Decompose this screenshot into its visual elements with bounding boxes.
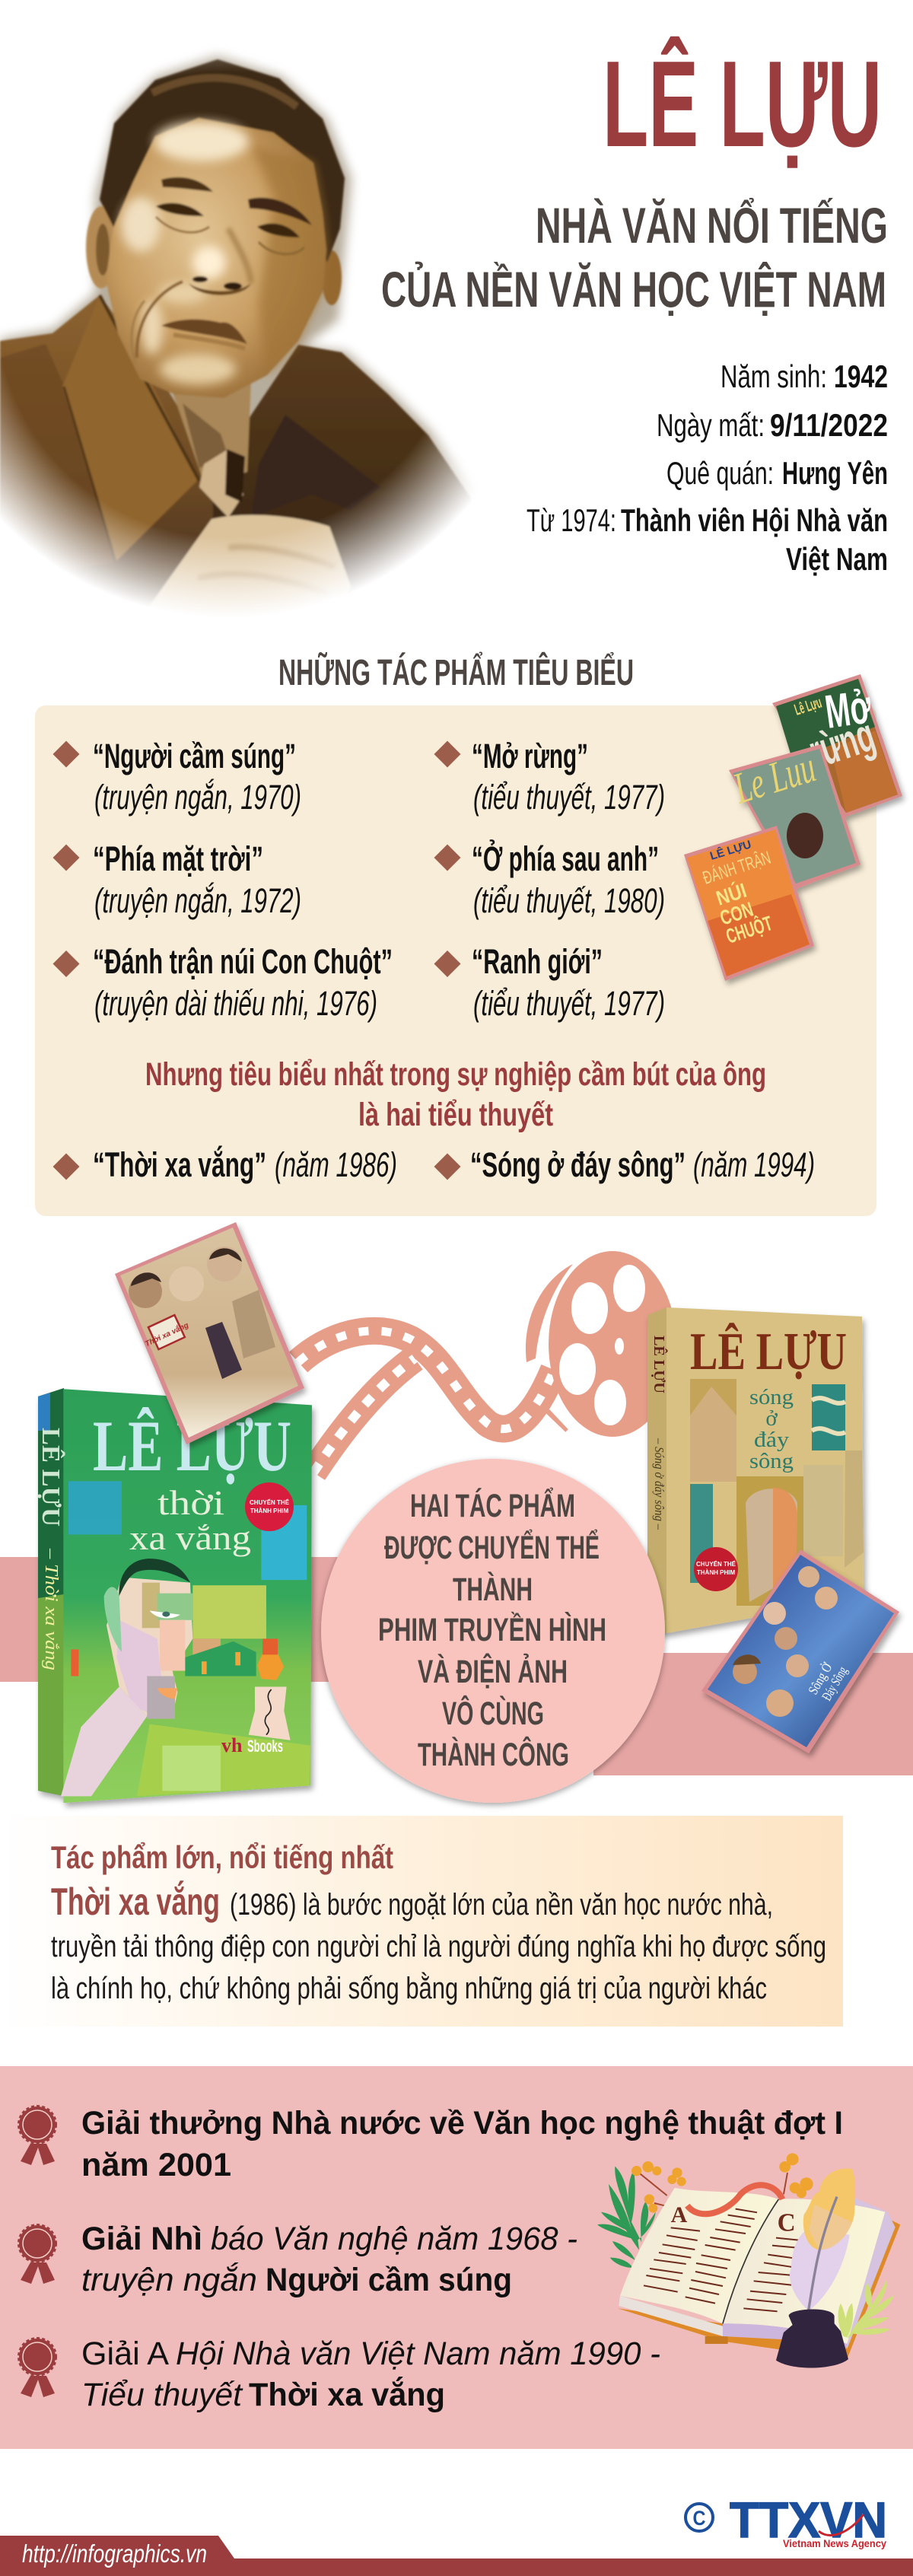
book cover: Sóng ở đáy sông: ở (765, 1406, 778, 1431)
list: works column one: “Đánh trận núi Con Chuột” (93, 942, 393, 981)
book cover: Thời xa vắng: vh (221, 1734, 243, 1756)
award 1: Giải thưởng Nhà nước về Văn học nghệ thuật đợt I (81, 2105, 843, 2141)
leaves and berries (597, 2153, 813, 2268)
two key novels: (năm 1994) (693, 1145, 815, 1184)
award 1 (19, 2105, 843, 2183)
poster: Thời xa vắng film (115, 1222, 304, 1444)
circle callout: film adaptations (321, 1459, 665, 1803)
book: A (671, 2202, 688, 2227)
circle callout: film adaptations: VÔ CÙNG (442, 1695, 544, 1732)
cover: Đánh trận núi Con Chuột: ĐÁNH TRẬN (701, 848, 773, 889)
two key novels: (năm 1986) (275, 1145, 397, 1184)
list: works column one: (truyện ngắn, 1970) (94, 778, 301, 817)
book cover: Thời xa vắng: thời (157, 1483, 224, 1522)
cover: Đánh trận núi Con Chuột: CON (717, 898, 756, 930)
author facts: 9/11/2022 (770, 407, 888, 443)
text box: most famous work (0, 1816, 843, 2027)
subtitle (381, 197, 888, 317)
list: works column two: (tiểu thuyết, 1980) (473, 881, 665, 920)
book cover: Sóng ở đáy sông: THÀNH PHIM (697, 1569, 735, 1576)
list: works column one (53, 737, 393, 1023)
list: works column one: “Người cầm súng” (93, 737, 296, 775)
list: works column two: “Ở phía sau anh” (472, 839, 659, 878)
collar left (62, 320, 198, 560)
book cover: Sóng ở đáy sông: sóng (749, 1385, 794, 1409)
highlight statement: là hai tiểu thuyết (358, 1097, 553, 1133)
ears (86, 206, 116, 288)
two key novels: “Sóng ở đáy sông” (470, 1145, 686, 1184)
book covers: small stack (684, 674, 902, 981)
book cover: Sóng ở đáy sông (647, 1307, 864, 1633)
book cover: Thời xa vắng (37, 1388, 312, 1803)
cheek folds (137, 282, 183, 358)
award 2: báo Văn nghệ năm 1968 - (211, 2221, 577, 2257)
DVD cover: Sóng ở đáy sông (701, 1549, 899, 1753)
two key novels: “Thời xa vắng” (93, 1145, 266, 1184)
quill (790, 2168, 855, 2315)
panel: representative works (35, 705, 876, 1216)
poster: Thời xa vắng film: Thời xa vắng (143, 1320, 190, 1348)
cover: Đánh trận núi Con Chuột: CHUỘT (723, 911, 775, 948)
award 2: truyện ngắn (81, 2262, 257, 2298)
book cover: Sóng ở đáy sông: đáy (754, 1428, 790, 1452)
cover: Mở rừng (772, 674, 902, 817)
award 2 (19, 2221, 577, 2298)
portrait photo: Lê Lựu (0, 55, 483, 639)
author facts: 1942 (834, 358, 888, 394)
book cover: Sóng ở đáy sông: LÊ LỰU (651, 1336, 669, 1393)
book cover: Thời xa vắng: LÊ LỰU (37, 1428, 65, 1527)
green sprig (838, 2281, 894, 2339)
footer bar with URL (0, 2536, 913, 2576)
author facts: Năm sinh: (721, 358, 827, 394)
illustration: open book, quill and inkwell (597, 2153, 900, 2368)
book cover: Thời xa vắng: – Thời xa vắng (41, 1548, 61, 1670)
list: works column two (434, 737, 665, 1023)
cover: Mở rừng: Mở (822, 680, 875, 739)
background band: right (593, 1653, 913, 1775)
circle callout: film adaptations: HAI TÁC PHẨM (410, 1487, 575, 1524)
text box: most famous work: Tác phẩm lớn, nổi tiếng nhất (51, 1839, 393, 1875)
book cover: Thời xa vắng: THÀNH PHIM (250, 1508, 288, 1514)
circle callout: film adaptations: THÀNH CÔNG (418, 1736, 569, 1773)
footer bar with URL: http://infographics.vn (22, 2539, 207, 2568)
list: works column two: (tiểu thuyết, 1977) (473, 778, 665, 817)
cover: Lê Lựu grey-green (727, 742, 861, 890)
book cover: Thời xa vắng: Sbooks (247, 1737, 283, 1756)
copyright symbol: C (692, 2507, 706, 2530)
award 3: Hội Nhà văn Việt Nam năm 1990 - (176, 2336, 660, 2372)
cover: Đánh trận núi Con Chuột (684, 826, 814, 981)
book cover: Thời xa vắng: xa vắng (129, 1518, 251, 1557)
book cover: Thời xa vắng: LÊ LỰU (93, 1406, 291, 1486)
face (106, 118, 326, 398)
cover: Lê Lựu grey-green: Le Luu (727, 742, 821, 814)
list: works column one: (truyện ngắn, 1972) (94, 881, 301, 920)
film strip (298, 1331, 554, 1473)
cover: Mở rừng: Lê Lựu (792, 694, 824, 719)
book cover: Sóng ở đáy sông: CHUYỂN THỂ (696, 1561, 736, 1568)
circle callout: film adaptations: ĐƯỢC CHUYỂN THỂ (384, 1529, 600, 1566)
DVD cover: Sóng ở đáy sông: Sông Ở (804, 1660, 835, 1697)
award 3: Giải A (81, 2336, 169, 2372)
collar right (254, 416, 379, 500)
award 3: Thời xa vắng (249, 2376, 445, 2413)
circle callout: film adaptations: THÀNH (453, 1571, 533, 1608)
list: works column one: (truyện dài thiếu nhi, 1976) (94, 984, 377, 1023)
list: works column two: “Mở rừng” (472, 737, 588, 775)
list: works column two: (tiểu thuyết, 1977) (473, 984, 665, 1023)
shirt (173, 384, 252, 475)
hair (100, 59, 345, 263)
book cover: Sóng ở đáy sông: sông (749, 1449, 794, 1473)
book: C (778, 2209, 796, 2237)
author facts: Quê quán: (666, 455, 774, 491)
nose (189, 283, 251, 295)
background band: left (0, 1557, 396, 1682)
heading: representative works: NHỮNG TÁC PHẨM TIÊU BIỂU (278, 651, 634, 693)
circle callout: film adaptations: VÀ ĐIỆN ẢNH (418, 1653, 568, 1690)
circle callout: film adaptations: PHIM TRUYỀN HÌNH (378, 1612, 606, 1648)
book cover: Sóng ở đáy sông: LÊ LỰU (690, 1323, 847, 1381)
book cover: Sóng ở đáy sông: – Sóng ở đáy sông – (652, 1438, 666, 1530)
text box: most famous work: Thời xa vắng (51, 1880, 220, 1923)
DVD cover: Sóng ở đáy sông: Đáy Sông (819, 1664, 850, 1703)
hand (152, 513, 350, 613)
award 2: Người cầm súng (266, 2262, 512, 2298)
list: works column two: “Ranh giới” (472, 942, 603, 981)
two key novels (53, 1145, 815, 1184)
author facts: Ngày mất: (657, 407, 765, 443)
award 3 (19, 2336, 660, 2413)
film reel (526, 1251, 676, 1437)
cover: Đánh trận núi Con Chuột: LÊ LỰU (708, 837, 753, 863)
panel: awards (0, 2066, 913, 2449)
book (618, 2185, 900, 2359)
inkwell (776, 2310, 848, 2368)
logo: TTXVN: Vietnam News Agency (783, 2537, 886, 2549)
book cover: Thời xa vắng: CHUYỂN THỂ (250, 1499, 290, 1506)
cover: Đánh trận núi Con Chuột: NÚI (713, 878, 749, 910)
soft halo (0, 50, 469, 492)
list: works column one: “Phía mặt trời” (93, 839, 263, 878)
eyebrows (161, 177, 213, 192)
highlights (121, 122, 249, 384)
copyright symbol (686, 2504, 713, 2531)
award 3: Tiểu thuyết (81, 2377, 243, 2413)
eyes (156, 203, 204, 216)
mouth (161, 320, 247, 344)
award 2: Giải Nhì (81, 2221, 202, 2257)
author facts: Từ 1974: (526, 502, 616, 538)
highlight statement (145, 1056, 766, 1133)
author facts (526, 358, 888, 577)
award 1: năm 2001 (81, 2147, 231, 2183)
jacket (0, 295, 215, 603)
logo: TTXVN: TTXVN (730, 2492, 887, 2548)
